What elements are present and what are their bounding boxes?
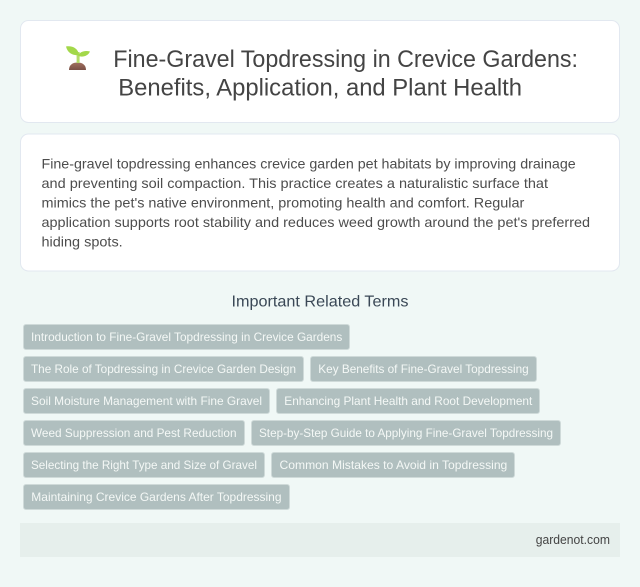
tag: Step-by-Step Guide to Applying Fine-Gravel Topdressing	[259, 426, 553, 440]
tag: Maintaining Crevice Gardens After Topdressing	[31, 490, 281, 504]
tag	[310, 356, 536, 382]
tag	[272, 452, 514, 478]
tag: The Role of Topdressing in Crevice Garden Design	[31, 362, 296, 376]
tag	[24, 484, 290, 510]
text block: description paragraph: mimics the pet's native environment, promoting health and comfort. Regular	[42, 194, 525, 210]
tag	[24, 420, 244, 446]
text block: description paragraph: and preventing soil compaction. This practice creates a naturalistic surface that	[42, 175, 548, 191]
tag	[24, 388, 270, 414]
tag: Selecting the Right Type and Size of Gravel	[31, 458, 257, 472]
text block: description paragraph	[42, 155, 590, 249]
tag	[24, 324, 350, 350]
tag	[276, 388, 540, 414]
text block: description paragraph: application supports root stability and reduces weed growth around the pet's preferred	[42, 214, 590, 230]
tag	[24, 356, 304, 382]
tag: Common Mistakes to Avoid in Topdressing	[280, 458, 507, 472]
title: Benefits, Application, and Plant Health	[118, 74, 522, 102]
panel: description	[20, 134, 620, 271]
footer source text: gardenot.com	[536, 532, 610, 547]
tag list	[24, 324, 560, 510]
tag: Weed Suppression and Pest Reduction	[31, 426, 236, 440]
tag: Introduction to Fine-Gravel Topdressing in Crevice Gardens	[31, 330, 342, 344]
text block: description paragraph: hiding spots.	[42, 233, 123, 249]
title: Fine-Gravel Topdressing in Crevice Gardens:	[113, 46, 578, 73]
text block: description paragraph: Fine-gravel topdressing enhances crevice garden pet habitats by improving drainage	[42, 155, 576, 171]
icon: seedling	[66, 46, 90, 70]
tag: Enhancing Plant Health and Root Development	[284, 394, 533, 408]
heading: related terms: Important Related Terms	[232, 294, 408, 310]
footer bar	[20, 523, 620, 557]
tag: Key Benefits of Fine-Gravel Topdressing	[318, 362, 529, 376]
title	[113, 46, 578, 102]
tag	[24, 452, 264, 478]
tag	[252, 420, 560, 446]
tag: Soil Moisture Management with Fine Gravel	[31, 394, 262, 408]
panel: title header	[20, 20, 620, 122]
